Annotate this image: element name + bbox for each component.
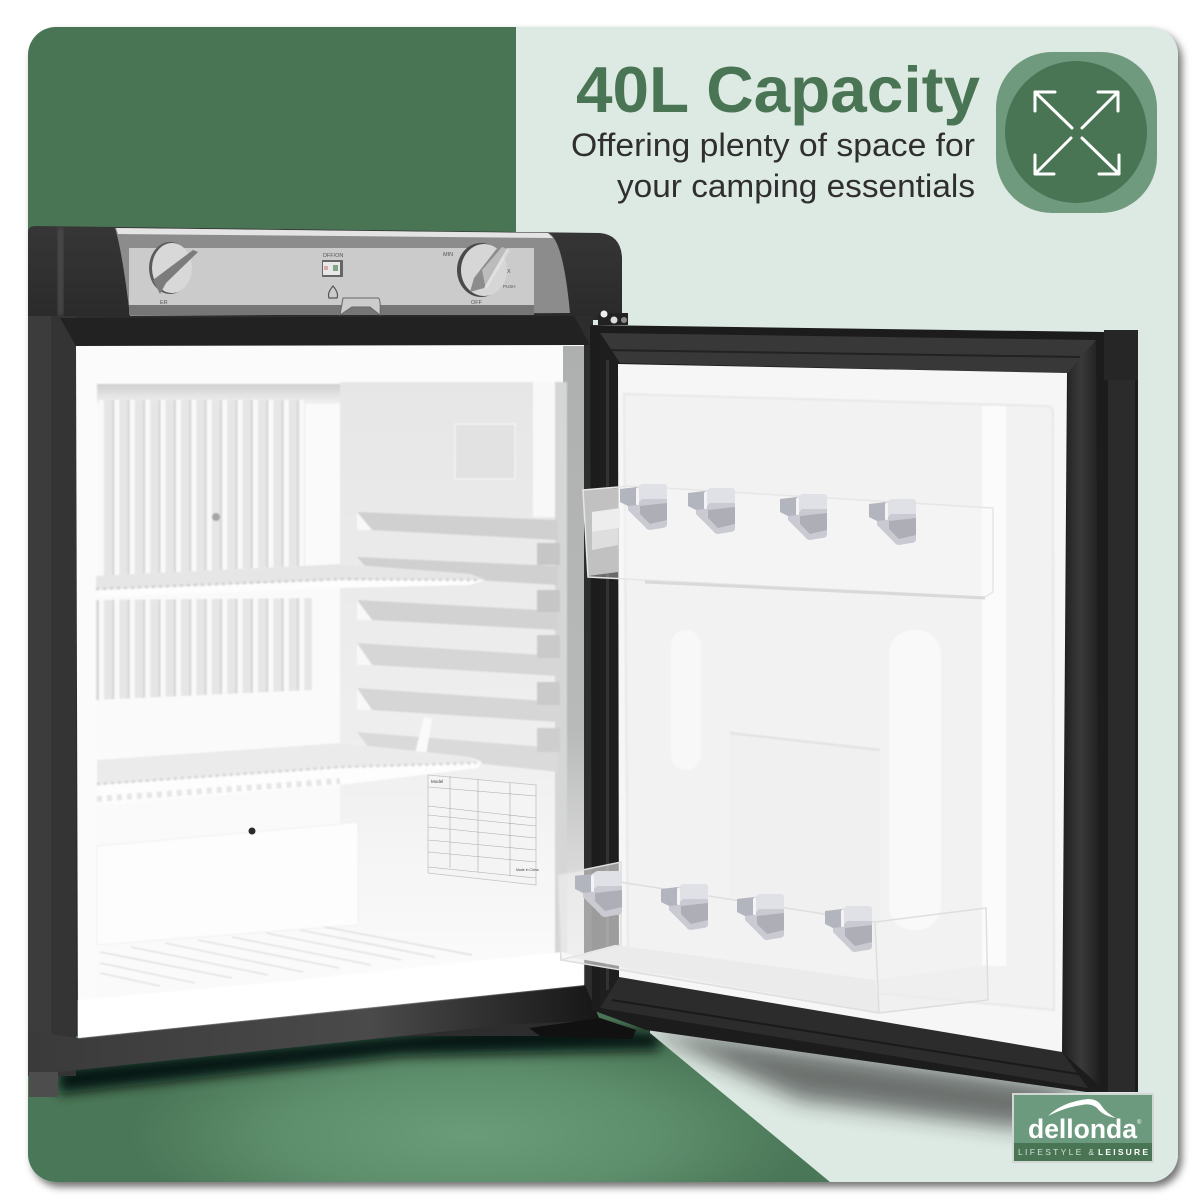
indicator switch: [322, 253, 343, 277]
evaporator fins upper: [99, 400, 305, 576]
latch: [340, 298, 380, 315]
logo tagline: LIFESTYLE &: [1018, 1147, 1094, 1157]
panel: dark green header block: [28, 27, 516, 242]
fridge top cap: [28, 226, 622, 320]
logo wordmark: dellonda: [1028, 1114, 1138, 1144]
lower back step: [340, 824, 356, 850]
logo: dellonda: [1013, 1094, 1153, 1162]
rear foot: [29, 1072, 58, 1097]
door inner liner: [618, 364, 1067, 1052]
rating label: Made in China: [516, 868, 539, 872]
panel labels: [160, 252, 516, 306]
upper bin clips: [620, 484, 916, 545]
door shadow on light floor: [640, 1028, 1090, 1128]
front lip: [78, 952, 584, 1038]
right frame edge: [563, 346, 584, 986]
hinge: [598, 310, 628, 325]
rating label: Model: [431, 779, 443, 784]
panel labels: MIN: [443, 252, 453, 258]
panel labels: ER: [160, 300, 168, 306]
heading: 40L Capacity: 40L Capacity: [576, 53, 980, 126]
description text: [571, 127, 975, 204]
side wall rails: [357, 512, 560, 772]
white interior frame: [76, 345, 584, 1038]
drain hole: [248, 828, 256, 834]
right wall: [340, 382, 555, 822]
panel labels: OFF: [471, 300, 483, 306]
front frame: [28, 316, 593, 1036]
panel labels: PUSH: [503, 284, 516, 289]
front foot: [529, 1018, 636, 1039]
fridge body: [28, 226, 636, 1097]
left knob: [149, 242, 198, 294]
logo: dellonda: LEISURE: [1098, 1147, 1148, 1157]
rating label: [428, 775, 539, 885]
flame icon: [328, 286, 338, 298]
floor ribs: [100, 927, 472, 986]
panel labels: X: [507, 269, 511, 275]
back wall: [97, 382, 340, 1000]
control panel: [115, 228, 570, 316]
strap: [416, 718, 432, 752]
bottom band: [28, 985, 600, 1072]
icon: expand arrows: [996, 52, 1157, 213]
door outer frame: [590, 325, 1138, 1092]
indicator switch: OFF/ON: [323, 253, 343, 259]
interior cavity: [78, 382, 584, 1038]
fridge door: [558, 325, 1138, 1092]
floor: green diagonal: [28, 1000, 830, 1182]
upper wire shelf: [96, 564, 484, 591]
door embossed panel: [624, 394, 1054, 1010]
evaporator fins lower: [96, 598, 312, 700]
lower bin clips: [575, 871, 872, 952]
screw: [212, 513, 220, 521]
door gasket: [600, 333, 1100, 1088]
description text: your camping essentials: [617, 168, 975, 204]
lower door bin: [558, 862, 988, 1013]
upper door bin: [583, 486, 993, 598]
registered mark: ®: [1137, 1119, 1142, 1126]
description text: Offering plenty of space for: [571, 127, 975, 163]
right knob: [457, 243, 510, 297]
lower wire shelf: [97, 743, 482, 805]
hinge post: [1104, 330, 1138, 380]
logo tagline band: [1014, 1143, 1152, 1161]
logo wave: [1048, 1099, 1116, 1118]
floor shadow under fridge: [58, 1022, 660, 1094]
